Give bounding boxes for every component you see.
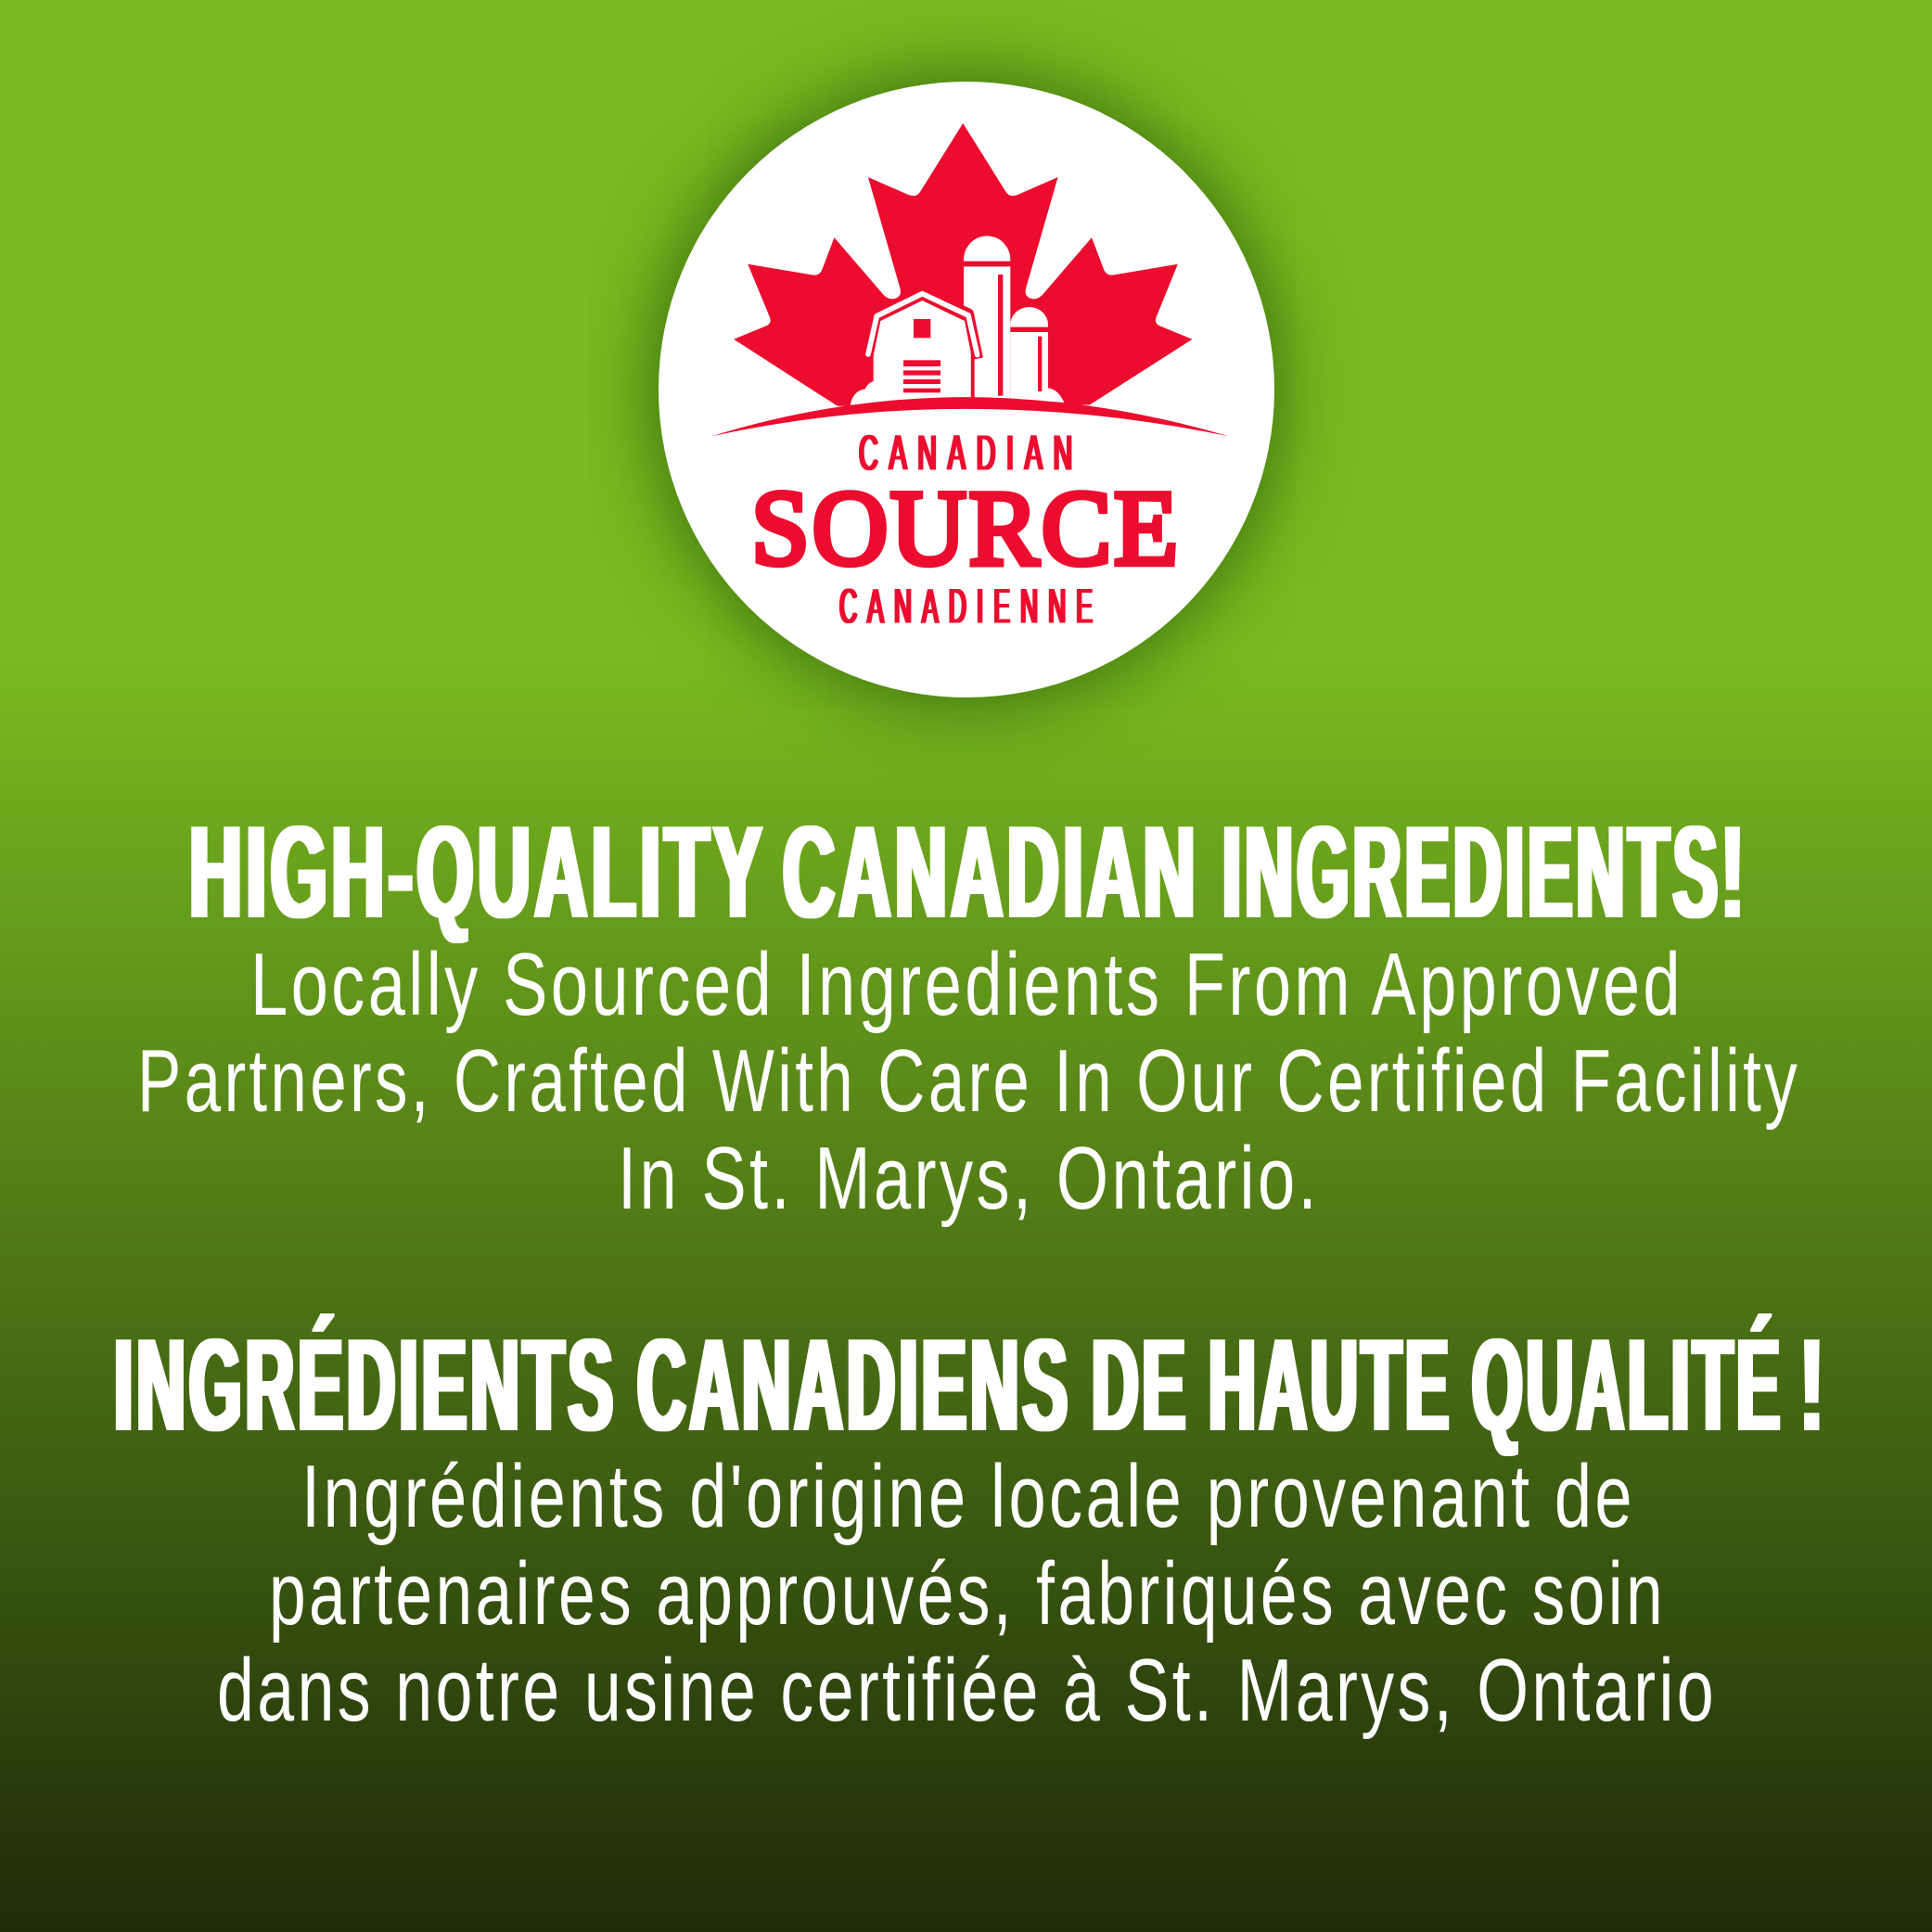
logo artwork bbox=[711, 123, 1228, 634]
French heading bbox=[114, 1311, 1827, 1459]
large silo bbox=[964, 236, 1064, 403]
English heading: HIGH-QUALITY bbox=[189, 799, 766, 946]
English heading: CANADIAN bbox=[783, 799, 1199, 946]
barn door bbox=[903, 360, 940, 392]
barn roof bbox=[876, 293, 978, 359]
French heading: INGRÉDIENTS bbox=[114, 1311, 617, 1459]
French heading: DE bbox=[1092, 1311, 1189, 1459]
French body text bbox=[217, 1447, 1717, 1740]
French heading: ! bbox=[1800, 1311, 1827, 1459]
English body text bbox=[137, 935, 1800, 1228]
English body text: In St. Marys, Ontario. bbox=[618, 1129, 1320, 1228]
English heading bbox=[189, 799, 1747, 946]
icon: maple leaf with hill bbox=[711, 123, 1228, 436]
barn body bbox=[851, 301, 971, 405]
French heading: CANADIENS bbox=[637, 1311, 1071, 1459]
logo wordmark bbox=[751, 426, 1181, 634]
logo badge bbox=[659, 82, 1274, 697]
icon: barn and silos bbox=[847, 236, 1069, 408]
barn window bbox=[914, 319, 930, 338]
CANADIENNE: CANADIENNE bbox=[839, 580, 1103, 634]
French heading: HAUTE bbox=[1209, 1311, 1452, 1459]
SOURCE: SOURCE bbox=[751, 469, 1181, 588]
CANADIAN: CANADIAN bbox=[859, 426, 1083, 481]
